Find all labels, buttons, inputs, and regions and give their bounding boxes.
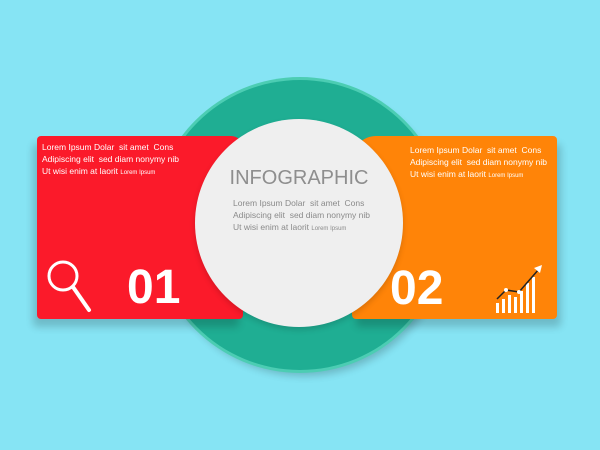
teal ring — [155, 80, 445, 370]
number 02: 02 — [390, 262, 443, 315]
center circle — [195, 119, 403, 327]
text block center: Lorem Ipsum Dolar sit amet Cons — [233, 198, 364, 208]
text block center: Ut wisi enim at laorit Lorem Ipsum — [233, 222, 346, 232]
panel: red 01 — [37, 136, 243, 319]
heading INFOGRAPHIC: INFOGRAPHIC — [230, 167, 368, 189]
text block red: Ut wisi enim at laorit Lorem Ipsum — [42, 166, 155, 176]
text block red: Adipiscing elit sed diam nonymy nib — [42, 154, 179, 164]
text block orange: Lorem Ipsum Dolar sit amet Cons — [410, 145, 541, 155]
text block center: Adipiscing elit sed diam nonymy nib — [233, 210, 370, 220]
text block orange — [410, 145, 547, 179]
text block orange: Adipiscing elit sed diam nonymy nib — [410, 157, 547, 167]
panel: orange 02 — [352, 136, 557, 319]
number 01: 01 — [127, 261, 180, 314]
icon: growth chart — [496, 265, 542, 313]
icon: magnifier — [48, 260, 92, 312]
text block orange: Ut wisi enim at laorit Lorem Ipsum — [410, 169, 523, 179]
text block red — [42, 142, 179, 176]
text block center — [233, 198, 370, 232]
text block red: Lorem Ipsum Dolar sit amet Cons — [42, 142, 173, 152]
